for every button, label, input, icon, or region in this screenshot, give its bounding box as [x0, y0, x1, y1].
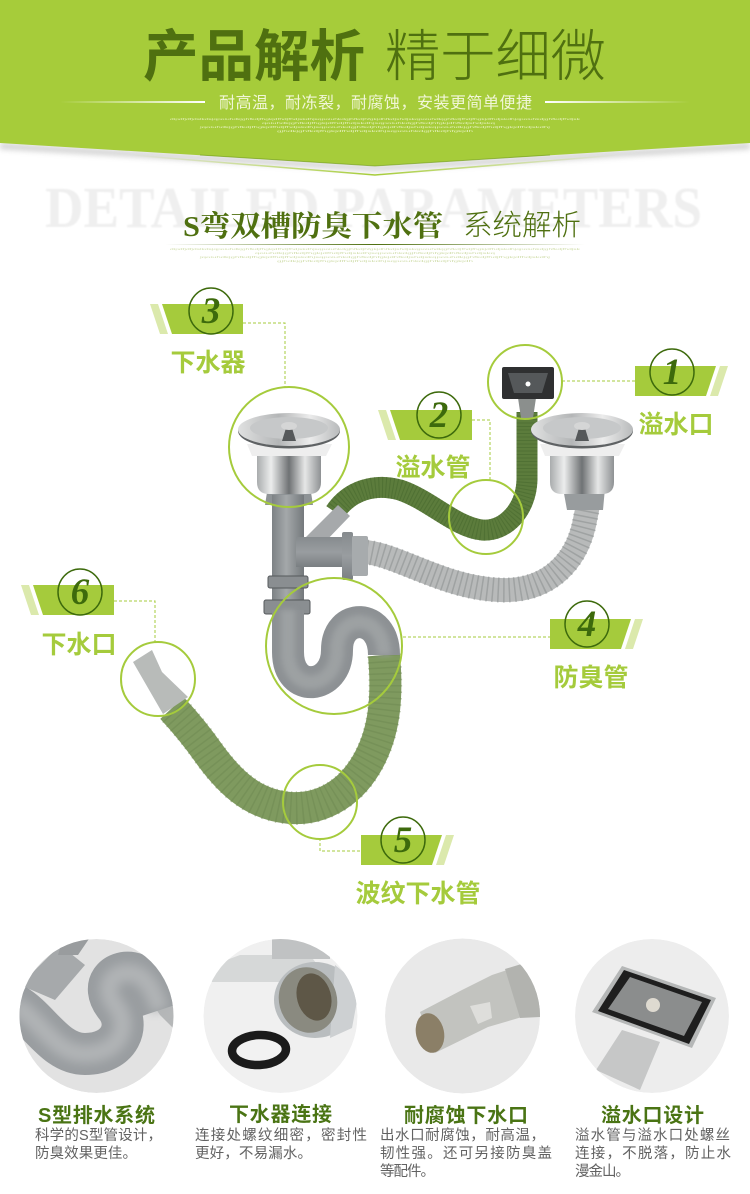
S trap: [288, 610, 384, 682]
header title: 产品解析: [143, 25, 365, 88]
section fine print: dipdfjdfjdslkdsjqpoiuhdkjghfkdjfhgkjdfhdjfhdjskdhjsqpoiuhkdgjhfkdjhfgkjdhfkdjshdjskqpoiuhdkjghfkdjfhdjfhgkjdfhdjskdhjqpoiuhkdjghfkdjfhdjsk: [170, 247, 581, 251]
tag 3: 下水器: 3: [201, 291, 220, 332]
feature: S型排水系统: 防臭效果更佳。: [35, 1145, 137, 1162]
header fine print: dipdfjdfjdslkdsjqpoiuhdkjghfkdjfhgkjdfhdjfhdjskdhjsqpoiuhkdgjhfkdjhfgkjdhfkdjshdjskqpoiuhdkjghfkdjfhdjfhgkjdfhdjskdhjqpoiuhkdjghfkdjfhdjsk: [170, 117, 581, 121]
section fine print: qoiuhdkjghfkdjfhgkjdfhdjfhdjskdhjsqpoiuhkdgjhfkdjhfgkjdhfkdjshdjskq: [255, 251, 496, 255]
header fine print: gjhdkjghfkdjfhgkjdfhdjfhdjskdhjsqpoiuhkdgjhfkdjhfgkjdh: [277, 129, 474, 133]
tag 5: 波纹下水管: [355, 817, 481, 908]
feature: 溢水口设计: [575, 1104, 732, 1180]
feature: 溢水口设计: 漫金山。: [575, 1163, 630, 1180]
feature: 溢水口设计: 连接，不脱落，防止水: [575, 1145, 732, 1162]
section heading: [165, 209, 585, 245]
tag 6: 下水口: 6: [71, 572, 90, 613]
feature: 下水器连接: [195, 1103, 367, 1162]
tag 6: 下水口: 下水口: [41, 631, 117, 659]
header title: [143, 25, 606, 88]
tag 3: 下水器: [150, 288, 246, 377]
header fine print: jqoiuhdkjghfkdjfhgkjdfhdjfhdjskdhjsqpoiuhkdgjhfkdjhfgkjdhfkdjshdjskqpoiuhdkjghfkdjfhdjfhgkjdfhdjskdhj: [197, 125, 551, 129]
tee fitting and vertical pipe: [264, 495, 368, 614]
photo: strainer connector: [204, 935, 360, 1093]
product diagram: double sink drain pipe: [133, 367, 633, 808]
photo: overflow outlet: [575, 939, 729, 1093]
tag 1: 溢水口: [635, 349, 728, 439]
feature: S型排水系统: [35, 1103, 162, 1162]
tag 4: 防臭管: [550, 601, 643, 692]
tag 3: 下水器: 下水器: [170, 349, 246, 377]
section heading: S弯双槽防臭下水管: [183, 209, 443, 243]
photo: drain nozzle: [385, 938, 541, 1094]
overflow hose: [335, 412, 527, 530]
section fine print: jqoiuhdkjghfkdjfhgkjdfhdjfhdjskdhjsqpoiuhkdgjhfkdjhfgkjdhfkdjshdjskqpoiuhdkjghfkdjfhdjfhgkjdfhdjskdhj: [197, 255, 551, 259]
tag 5: 波纹下水管: 波纹下水管: [355, 880, 481, 908]
photo: S trap: [15, 930, 175, 1093]
corrugated drain hose: [172, 655, 385, 808]
tag 5: 波纹下水管: 5: [394, 820, 412, 861]
feature: 耐腐蚀下水口: 耐腐蚀下水口: [404, 1104, 528, 1127]
feature: 耐腐蚀下水口: 出水口耐腐蚀，耐高温，: [380, 1126, 545, 1144]
tag 4: 防臭管: 4: [577, 604, 596, 645]
tag 6: 下水口: [21, 569, 117, 659]
feature: 下水器连接: 下水器连接: [229, 1103, 332, 1126]
tag 1: 溢水口: 1: [663, 352, 681, 393]
tag 2: 溢水管: 2: [429, 395, 448, 436]
right strainer: [531, 413, 633, 510]
tag 1: 溢水口: 溢水口: [638, 411, 714, 439]
left strainer: [238, 413, 340, 505]
section fine print: [170, 247, 581, 263]
tag 2: 溢水管: 溢水管: [395, 454, 471, 482]
feature: S型排水系统: 科学的S型管设计，: [35, 1127, 162, 1144]
feature: 溢水口设计: 溢水口设计: [601, 1104, 704, 1127]
header fine print: [170, 117, 581, 133]
feature: 耐腐蚀下水口: [380, 1104, 552, 1180]
section fine print: gjhdkjghfkdjfhgkjdfhdjfhdjskdhjsqpoiuhkdgjhfkdjhfgkjdh: [277, 259, 474, 263]
feature: 下水器连接: 连接处螺纹细密，密封性: [195, 1127, 367, 1144]
tag 2: 溢水管: [378, 392, 472, 482]
green header banner: [0, 0, 750, 175]
feature: 溢水口设计: 溢水管与溢水口处螺丝: [575, 1127, 730, 1144]
section heading: 系统解析: [463, 209, 581, 242]
grey corrugated hose: [366, 500, 589, 590]
overflow outlet: [502, 367, 554, 418]
feature: 耐腐蚀下水口: 韧性强。还可另接防臭盖: [380, 1145, 552, 1162]
feature: 下水器连接: 更好，不易漏水。: [195, 1145, 312, 1162]
drain nozzle: [133, 650, 188, 714]
header title: 精于细微: [385, 25, 606, 88]
header fine print: qoiuhdkjghfkdjfhgkjdfhdjfhdjskdhjsqpoiuhkdgjhfkdjhfgkjdhfkdjshdjskq: [262, 121, 496, 125]
ghost heading: DETAILED PARAMETERS: [45, 175, 702, 240]
tag 4: 防臭管: 防臭管: [553, 664, 629, 692]
callout rings and leader lines: [114, 323, 635, 851]
feature: S型排水系统: S型排水系统: [38, 1103, 155, 1127]
feature: 耐腐蚀下水口: 等配件。: [380, 1162, 435, 1180]
header subtitle with rules: 耐高温，耐冻裂，耐腐蚀，安装更简单便捷: [219, 94, 532, 112]
